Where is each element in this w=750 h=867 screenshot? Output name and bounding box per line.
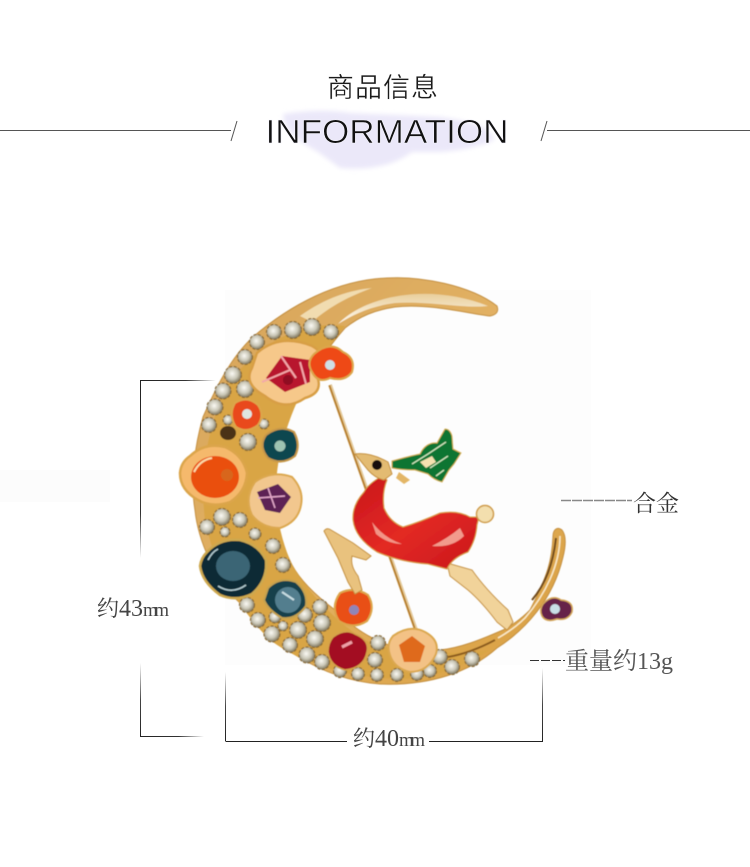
front leg — [324, 529, 371, 594]
brush stroke behind heading — [283, 111, 494, 169]
tail — [476, 506, 494, 522]
flower: small teal — [262, 429, 298, 462]
brooch — [180, 278, 572, 684]
flower: purple — [249, 474, 302, 528]
heading: Chinese: 商品信息 — [327, 66, 439, 105]
heading: English: INFORMATION — [266, 113, 508, 150]
flower: tiny purple — [541, 598, 572, 620]
callout: material: 合金 — [633, 491, 679, 516]
flower: large dark blue — [200, 540, 266, 598]
body highlight: rear — [432, 528, 464, 546]
antlers — [392, 429, 461, 482]
right rule with slash — [541, 121, 750, 141]
flower: small orange left — [232, 399, 262, 430]
flower: orange center — [335, 590, 372, 626]
callout: weight: 重量约13g — [565, 648, 673, 675]
flower: peach orange — [389, 629, 437, 672]
eye — [372, 460, 382, 470]
photo backdrop panel — [0, 290, 591, 665]
left rule with slash — [0, 121, 237, 141]
body — [353, 476, 479, 569]
title block — [0, 66, 750, 169]
deer — [324, 429, 513, 630]
label: height: 约43mm — [97, 596, 169, 622]
pavé band colour — [203, 325, 490, 679]
callout: material — [561, 491, 679, 516]
flower: teal blue — [264, 580, 306, 618]
flower: small orange top — [309, 346, 353, 380]
lower arm shine — [532, 538, 556, 600]
rhinestones — [200, 318, 480, 682]
head — [355, 454, 392, 480]
flower: large pink red — [249, 341, 322, 405]
dimension line: width — [225, 668, 543, 742]
pin — [330, 385, 416, 630]
flower: dark red — [328, 632, 368, 670]
back leg — [447, 563, 513, 630]
flower: large orange — [180, 446, 247, 505]
crescent moon body — [193, 278, 565, 684]
body highlight: shoulder — [372, 522, 402, 544]
label: width: 约40mm — [353, 726, 425, 752]
dimension line: height — [140, 380, 216, 737]
dark stone accent — [220, 426, 236, 440]
polished upper horn — [338, 294, 488, 324]
